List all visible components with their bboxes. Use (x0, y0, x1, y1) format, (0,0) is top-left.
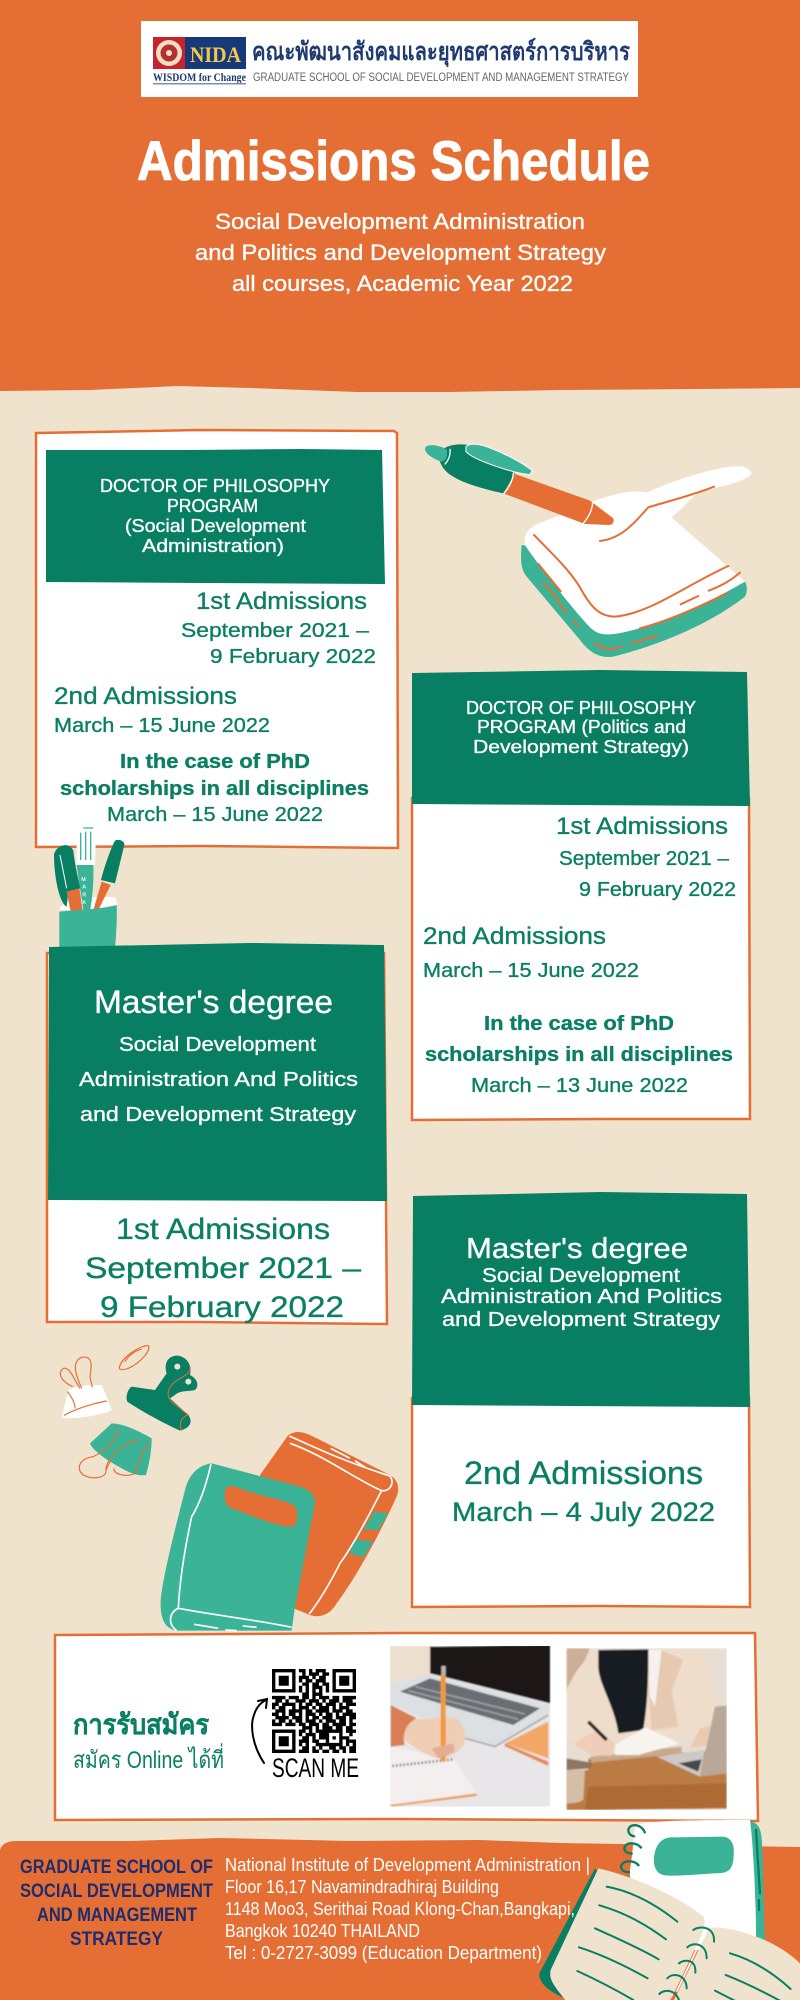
admissions dates: 2nd Admissions (423, 923, 606, 950)
icon: pencil cup: A (82, 885, 86, 891)
panel: online application (55, 1633, 758, 1821)
icon: binder clips and books (60, 1346, 398, 1631)
admissions dates: In the case of PhD (120, 751, 310, 773)
admissions dates: September 2021 – (559, 848, 730, 870)
footer band (0, 1838, 800, 2000)
icon: pen and notebook (425, 444, 752, 657)
footer school name: GRADUATE SCHOOL OF (20, 1857, 213, 1878)
logo panel (141, 21, 638, 97)
footer school name: STRATEGY (70, 1929, 163, 1950)
panel: masters first admissions (47, 943, 387, 1324)
panel header: doctoral social development (46, 449, 385, 584)
panel heading text: Social Development (119, 1034, 316, 1056)
panel header: doctoral politics (412, 670, 750, 806)
panel heading text: Master's degree (466, 1233, 688, 1265)
admissions dates: September 2021 – (181, 620, 370, 642)
footer address (225, 1855, 590, 1963)
panel heading text: DOCTOR OF PHILOSOPHY (100, 476, 330, 496)
logo panel: GRADUATE SCHOOL OF SOCIAL DEVELOPMENT AND MANAGEMENT STRATEGY (253, 72, 629, 84)
admissions dates: March – 13 June 2022 (471, 1075, 688, 1097)
admissions dates (54, 588, 376, 826)
panel heading text (100, 476, 330, 556)
logo panel: WISDOM for Change (153, 70, 247, 84)
admissions dates: 2nd Admissions (464, 1455, 703, 1491)
panel heading text: and Development Strategy (80, 1104, 356, 1126)
footer address: Bangkok 10240 THAILAND (225, 1921, 420, 1941)
admissions dates: 9 February 2022 (100, 1291, 344, 1324)
panel heading text (466, 698, 696, 757)
panel: doctoral social development (36, 430, 398, 848)
panel header: masters (48, 943, 387, 1201)
panel heading text: Social Development (482, 1265, 680, 1287)
panel heading text (79, 984, 358, 1126)
panel heading text: Administration) (142, 536, 284, 556)
panel header: masters (412, 1192, 750, 1407)
title: Admissions Schedule (137, 129, 650, 192)
panel heading text: DOCTOR OF PHILOSOPHY (466, 698, 696, 718)
subtitle: Social Development Administration (215, 209, 585, 234)
admissions dates: In the case of PhD (484, 1013, 674, 1035)
admissions dates: March – 4 July 2022 (452, 1497, 715, 1527)
icon: pencil cup: K (82, 900, 86, 906)
arrow to QR code (252, 1699, 267, 1763)
admissions dates: 9 February 2022 (210, 646, 376, 668)
admissions dates: 9 February 2022 (579, 879, 736, 901)
footer address: Floor 16,17 Navamindradhiraj Building (225, 1877, 499, 1897)
subtitle: and Politics and Development Strategy (195, 240, 606, 265)
admissions dates (452, 1455, 715, 1527)
admissions dates: March – 15 June 2022 (423, 960, 639, 982)
photo: woman writing at table (567, 1648, 727, 1810)
admissions dates: 1st Admissions (556, 813, 728, 840)
panel heading text: PROGRAM (Politics and (477, 717, 686, 737)
admissions dates: 1st Admissions (116, 1213, 330, 1246)
panel: doctoral politics and development strategy (412, 670, 750, 1120)
icon: pencil cup: M (81, 877, 86, 883)
footer school name: SOCIAL DEVELOPMENT (20, 1881, 213, 1902)
admissions dates: scholarships in all disciplines (425, 1044, 733, 1066)
footer address: 1148 Moo3, Serithai Road Klong-Chan,Bangkapi, (225, 1899, 575, 1919)
scan me label: SCAN ME (272, 1753, 359, 1783)
admissions dates (85, 1213, 361, 1324)
icon: pencil cup (54, 827, 124, 948)
footer school name (20, 1857, 213, 1950)
subtitle (195, 209, 606, 296)
footer address: Tel : 0-2727-3099 (Education Department) (225, 1943, 542, 1963)
panel heading text: Administration And Politics (79, 1069, 358, 1091)
panel heading text: and Development Strategy (442, 1309, 720, 1331)
footer school name: AND MANAGEMENT (37, 1905, 197, 1926)
admissions dates: 2nd Admissions (54, 683, 237, 710)
panel heading text (441, 1233, 722, 1331)
admissions dates: March – 15 June 2022 (107, 804, 323, 826)
footer address: National Institute of Development Administration | (225, 1855, 590, 1875)
logo panel: คณะพัฒนาสังคมและยุทธศาสตร์การบริหาร (252, 37, 630, 68)
photo: hand writing beside laptop (390, 1645, 550, 1807)
panel heading text: Administration And Politics (441, 1286, 722, 1308)
admissions dates: scholarships in all disciplines (60, 778, 369, 800)
header band (0, 0, 800, 392)
panel heading text: Development Strategy) (473, 737, 689, 757)
icon: pencil cup: R (82, 892, 86, 898)
subtitle: all courses, Academic Year 2022 (232, 271, 573, 296)
admissions dates: 1st Admissions (196, 588, 367, 615)
panel heading text: Master's degree (94, 984, 333, 1020)
admissions dates: March – 15 June 2022 (54, 715, 270, 737)
admissions dates (423, 813, 736, 1097)
logo panel: NIDA (190, 42, 241, 67)
panel: masters second admissions (412, 1192, 750, 1607)
panel heading text: PROGRAM (167, 496, 258, 516)
application heading: การรับสมัคร (73, 1709, 209, 1740)
application subtext: สมัคร Online ได้ที่ (73, 1743, 224, 1774)
icon: spiral notebook (539, 1820, 800, 2000)
admissions dates: September 2021 – (85, 1252, 361, 1285)
panel heading text: (Social Development (125, 516, 306, 536)
QR code (272, 1669, 356, 1753)
